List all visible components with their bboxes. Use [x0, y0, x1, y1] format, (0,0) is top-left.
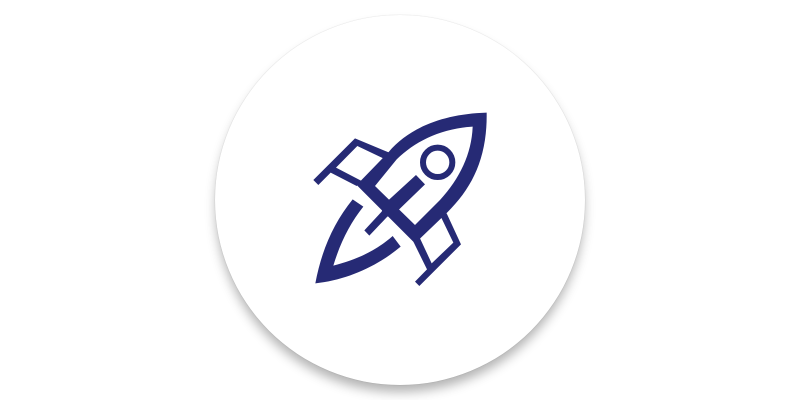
rocket upper hull [357, 113, 487, 243]
circular white badge [215, 15, 585, 385]
rocket inner stick [364, 175, 425, 236]
rocket lower-right fin [413, 213, 461, 286]
rocket nose cone [315, 199, 401, 283]
rocket porthole [423, 148, 452, 177]
rocket upper-left fin [313, 138, 389, 186]
